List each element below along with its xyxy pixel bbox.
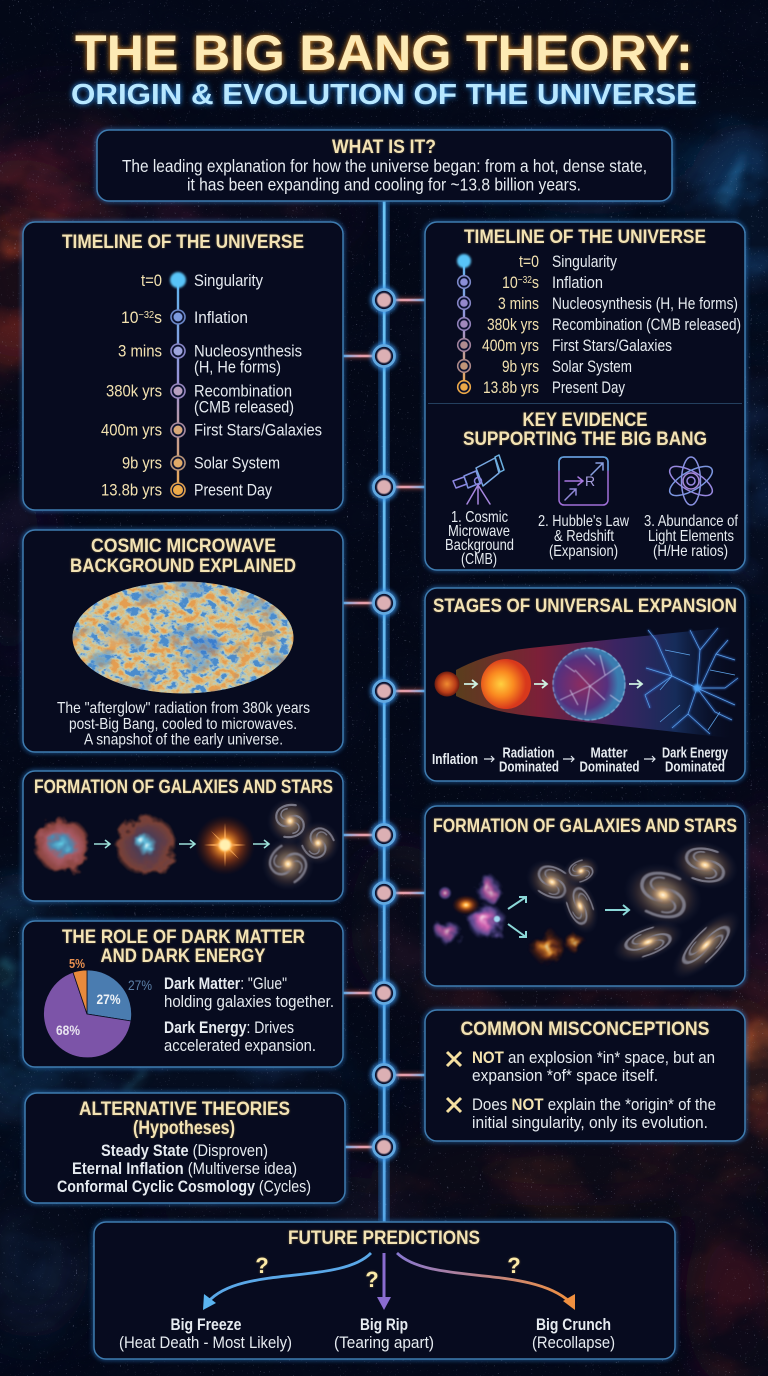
- heading: key evidence: SUPPORTING THE BIG BANG: [463, 429, 707, 450]
- panel: common misconceptions: [425, 1010, 745, 1141]
- icon: Hubble's law box: R: [585, 473, 595, 489]
- timeline labels: 3 mins: [118, 342, 162, 360]
- panel: what is it: [97, 130, 672, 201]
- panel: formation of galaxies and stars (left): FORMATION OF GALAXIES AND STARS: [34, 777, 333, 798]
- image: young galaxies: [518, 850, 605, 966]
- image: first star: [195, 815, 255, 875]
- panel: timeline and key evidence (right): TIMELINE OF THE UNIVERSE: [464, 227, 706, 248]
- timeline labels: 400m yrs: [101, 420, 162, 440]
- compact timeline labels: Solar System: [552, 357, 632, 376]
- outcome: big freeze: [119, 1315, 292, 1352]
- panel: cosmic microwave background: COSMIC MICROWAVE: [91, 536, 276, 557]
- panel: timeline of the universe (left): TIMELINE OF THE UNIVERSE: [62, 232, 304, 253]
- timeline labels: 10: [121, 308, 140, 327]
- arrow: big freeze: [203, 1253, 371, 1310]
- icon: Hubble's law box: [559, 457, 608, 505]
- dark matter and dark energy text: Dark Matter: "Glue": [164, 974, 287, 993]
- evidence captions: 2. Hubble's Law: [538, 513, 629, 530]
- expansion cone: [456, 627, 730, 738]
- outcome: big crunch: (Recollapse): [532, 1333, 615, 1352]
- panel: cosmic microwave background: BACKGROUND EXPLAINED: [70, 556, 296, 577]
- outcome: big rip: (Tearing apart): [334, 1333, 434, 1352]
- icon: atom: [665, 457, 717, 505]
- evidence captions: Light Elements: [648, 528, 734, 545]
- heading: main title: THE BIG BANG THEORY:: [75, 25, 693, 81]
- panel: formation of galaxies and stars (right): [425, 806, 750, 989]
- misconception text: Does NOT explain the *origin* of the: [472, 1095, 716, 1114]
- panel: stages of universal expansion: [425, 588, 745, 781]
- expansion stage labels: Dominated: [499, 758, 559, 776]
- evidence captions: [445, 509, 738, 568]
- compact timeline labels: [482, 252, 741, 397]
- timeline labels: (CMB released): [194, 398, 294, 416]
- misconception text: [472, 1048, 716, 1132]
- timeline labels: Solar System: [194, 454, 280, 472]
- image: spiral galaxies: [251, 798, 348, 901]
- panel: what is it: WHAT IS IT?: [332, 137, 436, 158]
- outcome: big crunch: Big Crunch: [536, 1315, 611, 1334]
- evidence captions: & Redshift: [554, 528, 614, 545]
- evidence captions: Background: [445, 537, 514, 554]
- compact timeline labels: Present Day: [552, 378, 625, 397]
- timeline labels: Recombination: [194, 382, 292, 400]
- timeline labels: Inflation: [194, 308, 248, 327]
- compact timeline labels: −32: [518, 275, 532, 286]
- question marks: ?: [507, 1253, 521, 1278]
- evidence captions: 1. Cosmic: [451, 509, 508, 526]
- outcome: big freeze: Big Freeze: [170, 1315, 242, 1334]
- compact timeline labels: 3 mins: [498, 294, 539, 313]
- panel: formation of galaxies and stars (left): [23, 771, 348, 901]
- panel: role of dark matter and dark energy: THE ROLE OF DARK MATTER: [62, 927, 305, 948]
- compact timeline labels: Singularity: [552, 252, 617, 271]
- expansion stage labels: Radiation: [502, 744, 554, 762]
- misconception text: expansion *of* space itself.: [472, 1066, 658, 1085]
- evidence captions: Microwave: [448, 523, 510, 540]
- expansion stage labels: Inflation: [432, 751, 478, 768]
- dark matter and dark energy text: accelerated expansion.: [164, 1036, 316, 1055]
- theories list: Conformal Cyclic Cosmology (Cycles): [57, 1177, 311, 1196]
- misconception text: initial singularity, only its evolution.: [472, 1113, 708, 1132]
- image: gas cloud: [34, 817, 90, 873]
- dark matter and dark energy text: [164, 974, 334, 1055]
- CMB sky map: [70, 580, 296, 696]
- expansion stage labels: [432, 744, 728, 776]
- CMB description: A snapshot of the early universe.: [84, 732, 283, 748]
- outcome: big freeze: (Heat Death - Most Likely): [119, 1333, 292, 1352]
- arrow: big crunch: [397, 1253, 575, 1310]
- timeline labels: 13.8b yrs: [101, 480, 162, 500]
- panel: what is it: it has been expanding and cooling for ~13.8 billion years.: [187, 174, 581, 194]
- dark matter and dark energy text: holding galaxies together.: [164, 992, 334, 1011]
- panel: future predictions: [94, 1222, 675, 1359]
- panel: role of dark matter and dark energy: AND DARK ENERGY: [100, 946, 266, 967]
- outcome: big rip: [334, 1315, 434, 1352]
- icon: cross marks: [447, 1052, 461, 1112]
- compact timeline labels: s: [532, 273, 539, 292]
- pie chart: 27%: [128, 977, 152, 993]
- compact timeline labels: 400m yrs: [482, 336, 539, 355]
- timeline labels: −32: [138, 310, 155, 321]
- pie chart: [44, 956, 152, 1058]
- timeline labels: 9b yrs: [122, 454, 162, 472]
- compact timeline labels: 9b yrs: [502, 357, 539, 376]
- central timeline spine with connectors: [343, 200, 425, 1224]
- panel: alternative theories: ALTERNATIVE THEORIES: [79, 1099, 290, 1120]
- heading: key evidence: [463, 410, 707, 450]
- dark matter and dark energy text: Dark Energy: Drives: [164, 1018, 294, 1037]
- question marks: ?: [255, 1253, 269, 1278]
- panel: alternative theories: [25, 1093, 345, 1203]
- CMB description: post-Big Bang, cooled to microwaves.: [69, 716, 297, 733]
- panel: common misconceptions: COMMON MISCONCEPTIONS: [460, 1019, 710, 1040]
- outcome: big rip: Big Rip: [360, 1315, 408, 1334]
- outcome: big crunch: [532, 1315, 615, 1352]
- expansion stage labels: Dominated: [665, 758, 725, 776]
- arrow: big rip: [377, 1253, 391, 1310]
- panel: stages of universal expansion: STAGES OF UNIVERSAL EXPANSION: [433, 596, 737, 617]
- panel: role of dark matter and dark energy: [23, 921, 343, 1067]
- heading: key evidence: KEY EVIDENCE: [522, 410, 648, 431]
- evidence captions: (CMB): [461, 551, 497, 568]
- timeline track: [170, 272, 186, 497]
- panel: timeline and key evidence (right): [425, 222, 745, 570]
- expansion arrows: [464, 680, 642, 688]
- theories list: Eternal Inflation (Multiverse idea): [72, 1159, 297, 1178]
- compact timeline labels: 380k yrs: [487, 315, 539, 334]
- timeline labels: First Stars/Galaxies: [194, 420, 322, 440]
- expansion stage labels: Dark Energy: [662, 744, 728, 762]
- compact timeline labels: t=0: [519, 252, 539, 271]
- question marks: ?: [365, 1267, 379, 1292]
- timeline labels: [101, 271, 322, 500]
- expansion spheres and network: [434, 628, 738, 734]
- panel: what is it: The leading explanation for how the universe began: from a hot, dense state,: [122, 156, 647, 176]
- theories list: Steady State (Disproven): [101, 1141, 268, 1160]
- CMB description: The "afterglow" radiation from 380k years: [57, 700, 310, 717]
- timeline labels: t=0: [141, 271, 162, 290]
- image: mature galaxies: [607, 834, 750, 989]
- expansion stage labels: Matter: [590, 744, 628, 762]
- theories list: [57, 1141, 311, 1196]
- evidence captions: (Expansion): [549, 543, 618, 560]
- timeline labels: 380k yrs: [106, 382, 162, 400]
- panel: timeline of the universe (left): [23, 222, 343, 510]
- timeline labels: (H, He forms): [194, 358, 281, 376]
- pie chart: 27%: [96, 991, 121, 1007]
- evidence captions: (H/He ratios): [653, 543, 728, 560]
- timeline labels: Nucleosynthesis: [194, 342, 302, 360]
- misconception text: NOT an explosion *in* space, but an: [472, 1048, 715, 1067]
- evidence captions: 3. Abundance of: [644, 513, 738, 530]
- formation arrows: [94, 840, 269, 848]
- image: star-forming clumps: [435, 875, 505, 945]
- compact timeline labels: 10: [502, 273, 521, 292]
- question marks: [255, 1253, 521, 1292]
- title: [71, 25, 697, 111]
- panel: cosmic microwave background: [23, 530, 343, 752]
- compact timeline labels: Inflation: [552, 273, 603, 292]
- formation arrows: [508, 897, 629, 937]
- image: protogalaxy: [115, 814, 177, 876]
- timeline labels: Singularity: [194, 271, 263, 290]
- timeline labels: Present Day: [194, 480, 272, 500]
- compact timeline track: [457, 254, 471, 393]
- timeline labels: s: [154, 308, 162, 327]
- panel: future predictions: FUTURE PREDICTIONS: [288, 1228, 480, 1249]
- pie chart: 68%: [56, 1022, 80, 1038]
- compact timeline labels: 13.8b yrs: [483, 378, 539, 397]
- pie chart: 5%: [69, 956, 85, 971]
- expansion stage labels: Dominated: [580, 758, 640, 776]
- heading: subtitle: ORIGIN & EVOLUTION OF THE UNIVERSE: [71, 79, 697, 111]
- compact timeline labels: First Stars/Galaxies: [552, 336, 672, 355]
- CMB description: [57, 700, 310, 748]
- icon: telescope: [453, 455, 504, 504]
- panel: alternative theories: (Hypotheses): [133, 1118, 235, 1139]
